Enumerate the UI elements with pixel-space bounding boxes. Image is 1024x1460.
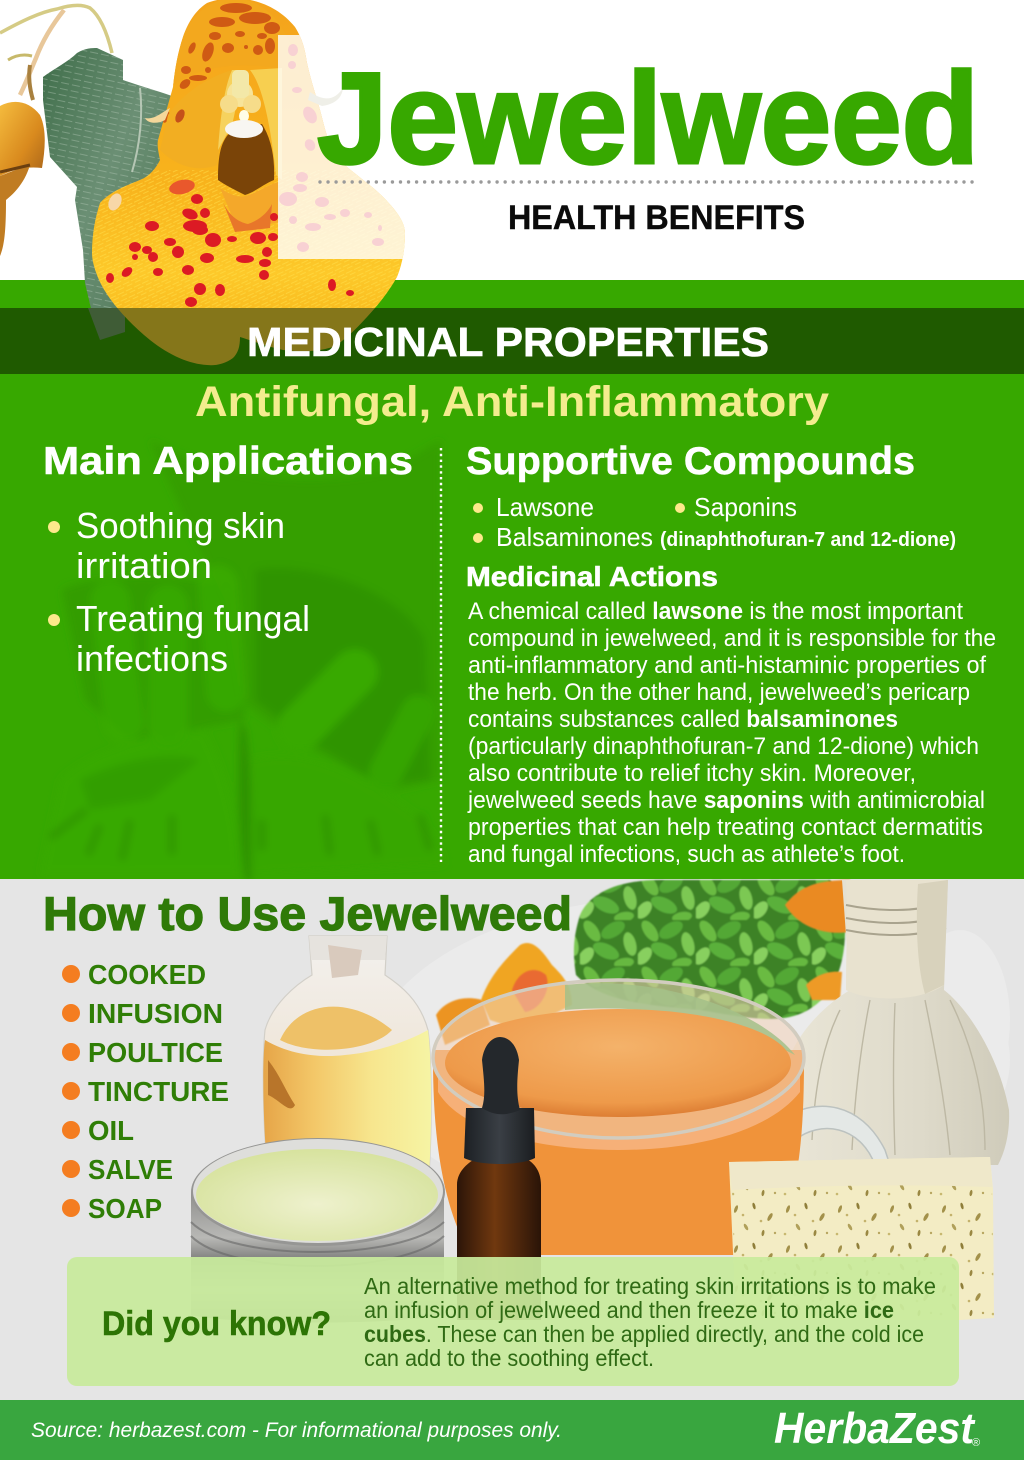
toes bbox=[50, 810, 430, 860]
panel: how to use bbox=[0, 879, 1024, 1400]
bullet list: irritation bbox=[76, 545, 212, 586]
image: glass tea cup bbox=[430, 980, 890, 1265]
heading: medicinal actions: Medicinal Actions bbox=[466, 561, 718, 592]
heading: medicinal properties: MEDICINAL PROPERTIES bbox=[247, 319, 769, 365]
subheading: properties: Antifungal, Anti-Inflammatory bbox=[195, 378, 829, 426]
image: oil bottle bbox=[263, 936, 431, 1175]
text block: did you know: an infusion of jewelweed and then freeze it to make ice bbox=[364, 1297, 894, 1323]
text block: did you know: can add to the soothing effect. bbox=[364, 1345, 654, 1371]
bullet list bbox=[48, 505, 310, 679]
stamen bbox=[227, 84, 253, 107]
image: dropper bottle bbox=[457, 1037, 541, 1320]
text block: medicinal actions: compound in jewelweed, and it is responsible for the bbox=[468, 625, 996, 652]
flower seen through band bbox=[88, 308, 375, 366]
text block: medicinal actions: the herb. On the other hand, jewelweed’s pericarp bbox=[468, 679, 970, 706]
text block: did you know: cubes. These can then be applied directly, and the cold ice bbox=[364, 1321, 924, 1347]
image: herbs and orange flowers bbox=[436, 880, 850, 1045]
compound list bbox=[473, 492, 956, 552]
background: header bbox=[0, 0, 1024, 280]
pale overlay bbox=[278, 35, 410, 259]
bullet list: Soothing skin bbox=[76, 505, 285, 546]
callout: did you know bbox=[67, 1257, 959, 1386]
list: preparations: TINCTURE bbox=[88, 1076, 229, 1107]
icon: plant stems and bud bbox=[0, 5, 112, 256]
list: preparations: INFUSION bbox=[88, 998, 223, 1029]
list: preparations: OIL bbox=[88, 1115, 134, 1146]
image: poultice bag bbox=[788, 880, 1009, 1165]
text block: medicinal actions: properties that can help treating contact dermatitis bbox=[468, 814, 983, 841]
heading: did you know: Did you know? bbox=[102, 1305, 331, 1343]
compound list: Lawsone bbox=[496, 492, 594, 522]
text block: medicinal actions: contains substances called balsaminones bbox=[468, 706, 898, 733]
photo: hands scratching feet bbox=[40, 440, 445, 880]
text block: did you know bbox=[364, 1273, 936, 1371]
text block: medicinal actions: anti-inflammatory and anti-histaminic properties of bbox=[468, 652, 986, 679]
title: Jewelweed bbox=[317, 45, 979, 191]
red spots bbox=[106, 44, 384, 307]
logo: HerbaZest: HerbaZest bbox=[774, 1404, 976, 1453]
list: preparations bbox=[62, 959, 229, 1224]
panel: medicinal properties bbox=[0, 280, 1024, 880]
text block: medicinal actions: also contribute to relief itchy skin. Moreover, bbox=[468, 760, 916, 787]
throat bbox=[218, 124, 274, 195]
hood bbox=[173, 31, 186, 86]
text block: did you know: An alternative method for treating skin irritations is to make bbox=[364, 1273, 936, 1299]
spur fragments bbox=[145, 108, 170, 123]
subtitle: HEALTH BENEFITS bbox=[508, 199, 805, 237]
compound list: Balsaminones bbox=[496, 522, 653, 552]
heading: how to use: How to Use Jewelweed bbox=[43, 887, 572, 940]
text block: medicinal actions bbox=[467, 598, 996, 868]
logo: HerbaZest: ® bbox=[972, 1437, 980, 1449]
column: supportive compounds bbox=[466, 440, 996, 868]
image: herbal soap bbox=[729, 1157, 994, 1320]
side lobes bbox=[166, 113, 170, 122]
source note: Source: herbazest.com - For informational purposes only. bbox=[31, 1419, 562, 1442]
column: supportive compounds: Supportive Compounds bbox=[466, 440, 915, 483]
compound list: Saponins bbox=[694, 492, 797, 522]
list: preparations: SALVE bbox=[88, 1154, 173, 1185]
text block: medicinal actions: jewelweed seeds have saponins with antimicrobial bbox=[467, 787, 985, 814]
footer bbox=[0, 1400, 1024, 1460]
image: salve tin bbox=[191, 1138, 445, 1322]
compound list: (dinaphthofuran-7 and 12-dione) bbox=[660, 529, 956, 551]
column divider bbox=[440, 448, 442, 862]
text block: medicinal actions: A chemical called lawsone is the most important bbox=[468, 598, 963, 625]
column: main applications bbox=[43, 440, 413, 679]
icon: jewelweed flower bbox=[92, 0, 405, 308]
bullet list: Treating fungal bbox=[76, 598, 310, 639]
text block: medicinal actions: (particularly dinaphthofuran-7 and 12-dione) which bbox=[468, 733, 979, 760]
list: preparations: COOKED bbox=[88, 959, 206, 990]
band: section header bbox=[0, 308, 1024, 374]
list: preparations: SOAP bbox=[88, 1193, 162, 1224]
column: main applications: Main Applications bbox=[43, 440, 413, 483]
bullet list: infections bbox=[76, 638, 228, 679]
icon: green leaf bbox=[43, 48, 178, 338]
text block: medicinal actions: and fungal infections, such as athlete’s foot. bbox=[468, 841, 905, 868]
list: preparations: POULTICE bbox=[88, 1037, 223, 1068]
